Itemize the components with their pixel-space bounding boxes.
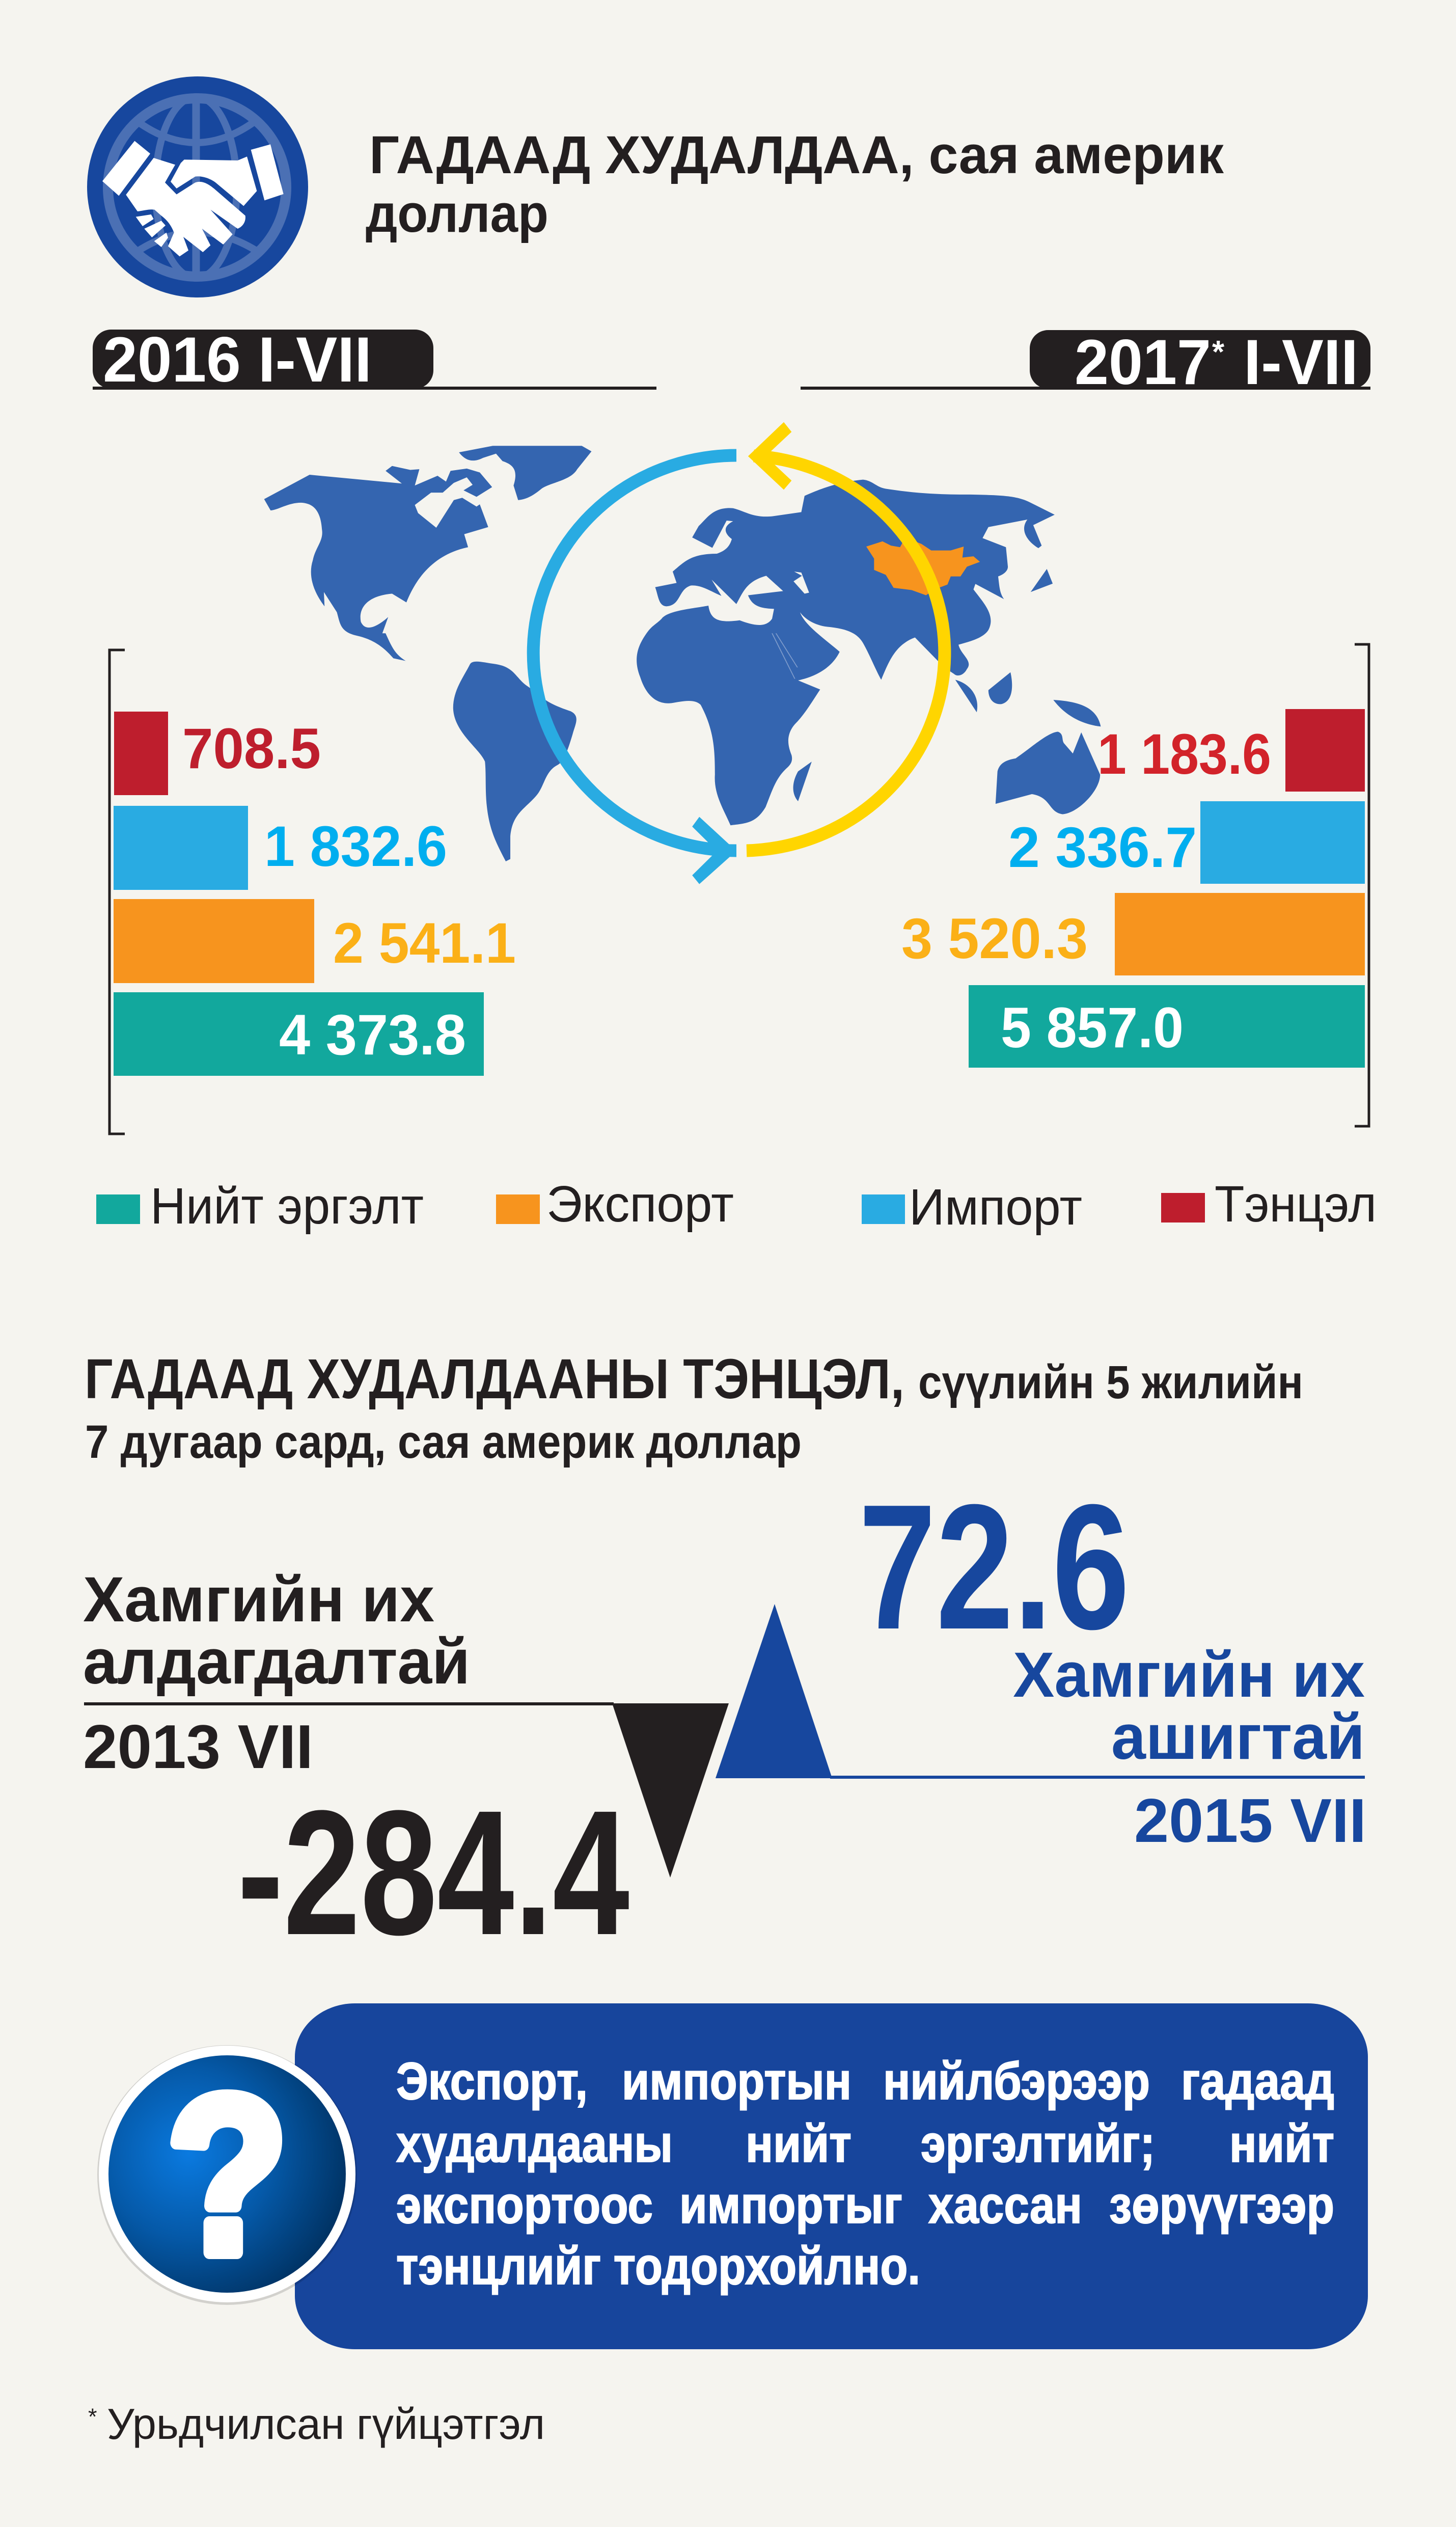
largest deficit block: 2013 VII bbox=[83, 1712, 313, 1781]
callout text: гадаад bbox=[1181, 2052, 1334, 2110]
period label: 2017 I-VII bbox=[801, 327, 1370, 398]
callout text: худалдааны bbox=[396, 2114, 673, 2173]
bar: export 3 520.3 bbox=[901, 893, 1365, 975]
legend: Импорт bbox=[909, 1179, 1082, 1236]
callout: definition panel bbox=[295, 2003, 1368, 2349]
bar: export 2 541.1 bbox=[114, 899, 516, 983]
title bbox=[366, 125, 1224, 243]
arrow: blue circular arc bbox=[533, 455, 736, 884]
period label: 2017 I-VII: * bbox=[1212, 335, 1225, 370]
bar: balance 708.5: 708.5 bbox=[182, 717, 321, 780]
period label: 2016 I-VII: 2016 I-VII bbox=[103, 324, 372, 395]
largest deficit block: алдагдалтай bbox=[83, 1626, 470, 1697]
bar: balance 1 183.6: 1 183.6 bbox=[1097, 722, 1271, 786]
callout text bbox=[396, 2052, 1334, 2295]
largest surplus block: 72.6 bbox=[859, 1468, 1130, 1667]
legend: Тэнцэл bbox=[1215, 1176, 1377, 1233]
heading: trade balance bbox=[85, 1348, 1303, 1468]
icon: globe with handshake bbox=[87, 76, 308, 297]
largest surplus block: 2015 VII bbox=[1134, 1786, 1366, 1855]
callout text: эргэлтийг; bbox=[921, 2114, 1155, 2173]
callout text: хассан bbox=[928, 2176, 1082, 2234]
bar: balance 1 183.6 bbox=[1097, 709, 1365, 792]
bar: balance 708.5 bbox=[114, 712, 321, 795]
period label: 2016 I-VII bbox=[93, 324, 656, 395]
footnote: Урьдчилсан гүйцэтгэл bbox=[107, 2400, 545, 2449]
bar chart: 2016 I-VII bbox=[109, 650, 516, 1134]
heading: trade balance: ГАДААД ХУДАЛДААНЫ ТЭНЦЭЛ, bbox=[85, 1348, 904, 1410]
bar: total turnover 5 857.0: 5 857.0 bbox=[1001, 996, 1184, 1059]
icon: down triangle bbox=[612, 1703, 729, 1878]
icon: Mongolia highlighted bbox=[866, 537, 980, 595]
legend bbox=[96, 1176, 1377, 1236]
period label: 2017 I-VII: 2017 bbox=[1075, 327, 1211, 398]
callout text: нийт bbox=[1229, 2114, 1334, 2173]
bar chart: 2017 I-VII bbox=[901, 644, 1369, 1126]
largest surplus block: Хамгийн их bbox=[1013, 1640, 1365, 1710]
title: ГАДААД ХУДАЛДАА, сая америк bbox=[369, 125, 1224, 185]
world map bbox=[264, 446, 1101, 861]
callout text: зөрүүгээр bbox=[1109, 2176, 1334, 2234]
callout text: нийт bbox=[746, 2114, 851, 2173]
bar: import 1 832.6 bbox=[114, 806, 447, 890]
title: доллар bbox=[366, 184, 548, 243]
bar: total turnover 4 373.8: 4 373.8 bbox=[279, 1003, 466, 1067]
period label: 2017 I-VII: I-VII bbox=[1244, 327, 1358, 398]
icon: question mark badge bbox=[97, 2045, 357, 2305]
largest deficit block: -284.4 bbox=[237, 1773, 630, 1972]
heading: trade balance: 7 дугаар сард, сая америк доллар bbox=[85, 1416, 802, 1468]
heading: trade balance: сүүлийн 5 жилийн bbox=[918, 1356, 1303, 1408]
legend: Экспорт bbox=[546, 1176, 734, 1233]
callout text: импортыг bbox=[679, 2176, 902, 2234]
callout text: экспортоос bbox=[396, 2176, 653, 2234]
arrow: yellow circular arc bbox=[747, 422, 945, 851]
callout text: импортын bbox=[622, 2052, 851, 2110]
bar: export 3 520.3: 3 520.3 bbox=[901, 907, 1088, 970]
footnote: * bbox=[88, 2404, 97, 2430]
icon: up triangle bbox=[716, 1604, 832, 1778]
largest surplus block bbox=[716, 1468, 1366, 1855]
bar: export 2 541.1: 2 541.1 bbox=[333, 911, 516, 975]
legend: Нийт эргэлт bbox=[150, 1178, 424, 1235]
callout text: тэнцлийг тодорхойлно. bbox=[396, 2237, 920, 2295]
largest surplus block: ашигтай bbox=[1111, 1702, 1365, 1773]
callout text: нийлбэрээр bbox=[883, 2052, 1150, 2110]
bar: total turnover 5 857.0 bbox=[969, 985, 1365, 1068]
callout text: Экспорт, bbox=[396, 2052, 588, 2110]
bar: import 2 336.7: 2 336.7 bbox=[1008, 816, 1197, 879]
largest deficit block: Хамгийн их bbox=[83, 1564, 434, 1635]
largest deficit block bbox=[83, 1564, 729, 1972]
icon: question mark badge: ? bbox=[167, 2050, 288, 2300]
bar: total turnover 4 373.8 bbox=[114, 992, 484, 1076]
bar: import 2 336.7 bbox=[1008, 801, 1365, 884]
bar: import 1 832.6: 1 832.6 bbox=[264, 814, 447, 878]
